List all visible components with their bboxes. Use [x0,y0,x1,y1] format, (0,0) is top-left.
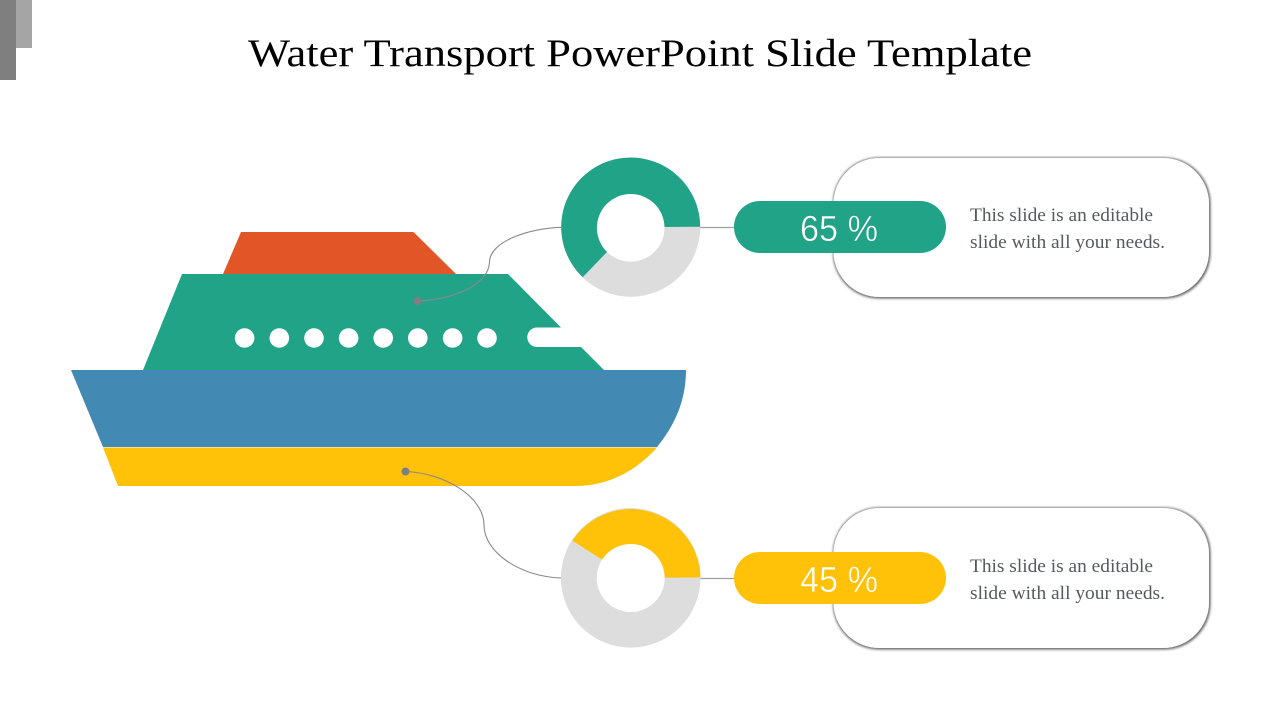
pill: 45 percent: 45 % [800,559,878,600]
ship upper deck [143,274,604,370]
portholes [235,328,497,348]
text block: bottom: This slide is an editable [970,556,1153,577]
text block: bottom: slide with all your needs. [970,583,1165,604]
card: top [834,158,1209,297]
pill: 45 percent [734,552,946,604]
card: bottom [834,508,1209,648]
title: Water Transport PowerPoint Slide Template [248,32,1032,75]
connector: deck to green donut [414,227,562,305]
pill: 65 percent: 65 % [800,208,878,249]
connector: hull to yellow donut [402,468,562,578]
corner decoration [0,0,32,80]
pill: 65 percent [734,201,946,253]
donut: 45 percent [561,508,700,648]
text block: top: This slide is an editable [970,205,1153,226]
ship hull blue band [71,370,686,447]
donut: 65 percent [561,158,700,297]
ship funnel deck [223,232,456,274]
text block: top: slide with all your needs. [970,232,1165,253]
ship illustration [71,232,686,486]
text block: bottom [970,556,1165,604]
link line: bottom donut to pill [699,578,735,580]
link line: top donut to pill [699,226,735,228]
text block: top [970,205,1165,253]
ship hull yellow band [103,448,657,486]
